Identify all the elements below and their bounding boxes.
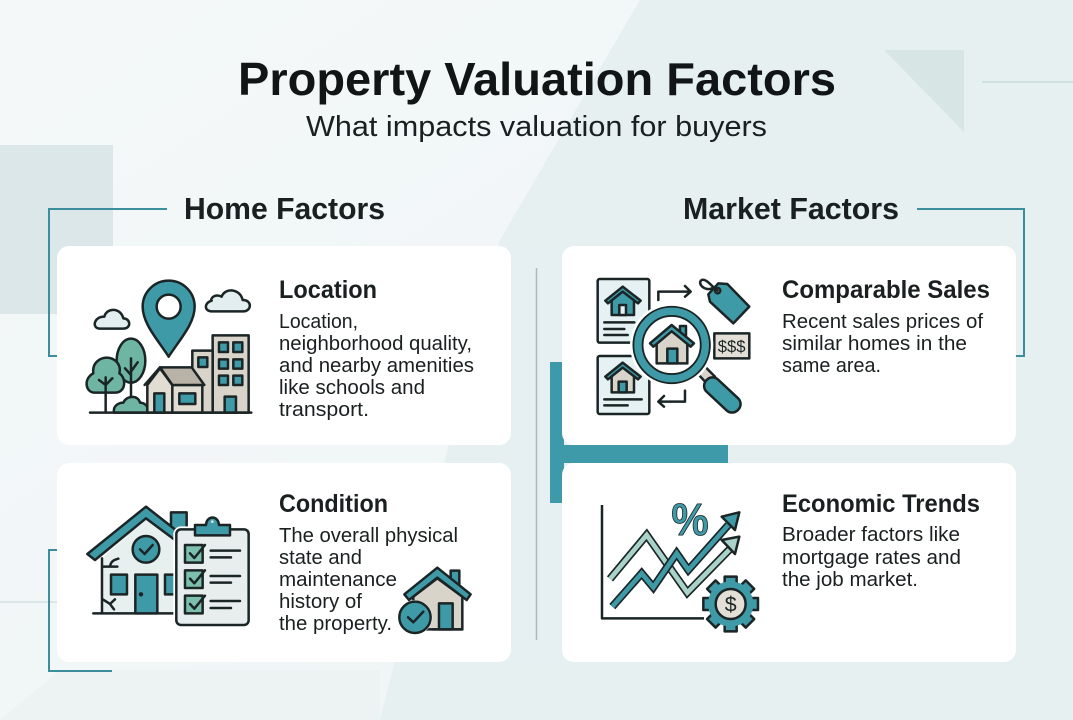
- text: condition description: the property.: [279, 613, 392, 635]
- text: location description: like schools and: [279, 377, 425, 399]
- icon: rising trend chart with gear: %: [671, 494, 709, 545]
- icon: house with checklist: [87, 507, 249, 625]
- icon: small house with check: [398, 568, 471, 635]
- heading: market factors: Market Factors: [683, 191, 899, 226]
- text: comparable sales description: Recent sales prices of: [782, 311, 983, 333]
- text: condition description: state and: [279, 547, 362, 569]
- text: location description: neighborhood quality,: [279, 333, 472, 355]
- text: economic trends description: Broader factors like: [782, 524, 960, 546]
- title: Property Valuation Factors: [238, 53, 836, 105]
- text: comparable sales description: same area.: [782, 355, 881, 377]
- subtitle: What impacts valuation for buyers: [306, 111, 767, 143]
- heading: condition: Condition: [279, 490, 388, 518]
- text: location description: [279, 311, 474, 421]
- icon: rising trend chart with gear: $: [725, 593, 737, 617]
- heading: economic trends: Economic Trends: [782, 490, 980, 518]
- text: comparable sales description: [782, 311, 983, 377]
- icon: rising trend chart with gear: [602, 494, 758, 631]
- panel: condition: [57, 463, 511, 662]
- text: condition description: history of: [279, 591, 362, 613]
- panel: comparable sales: [562, 246, 1016, 445]
- text: condition description: The overall physical: [279, 525, 458, 547]
- heading: comparable sales: Comparable Sales: [782, 276, 990, 304]
- text: comparable sales description: similar homes in the: [782, 333, 967, 355]
- panel: location: [57, 246, 511, 445]
- text: economic trends description: mortgage rates and: [782, 547, 961, 569]
- text: location description: transport.: [279, 399, 369, 421]
- icon: comparable homes under magnifier: [598, 279, 749, 416]
- heading: home factors: Home Factors: [184, 191, 385, 226]
- heading: location: Location: [279, 276, 377, 304]
- panel: economic trends: [562, 463, 1016, 662]
- text: condition description: [279, 525, 458, 635]
- icon: location and neighborhood: [87, 281, 251, 413]
- text: economic trends description: the job market.: [782, 569, 918, 591]
- icon: comparable homes under magnifier: $$$: [718, 337, 746, 356]
- text: condition description: maintenance: [279, 569, 397, 591]
- text: economic trends description: [782, 524, 961, 591]
- text: location description: Location,: [279, 311, 358, 333]
- text: location description: and nearby amenities: [279, 355, 474, 377]
